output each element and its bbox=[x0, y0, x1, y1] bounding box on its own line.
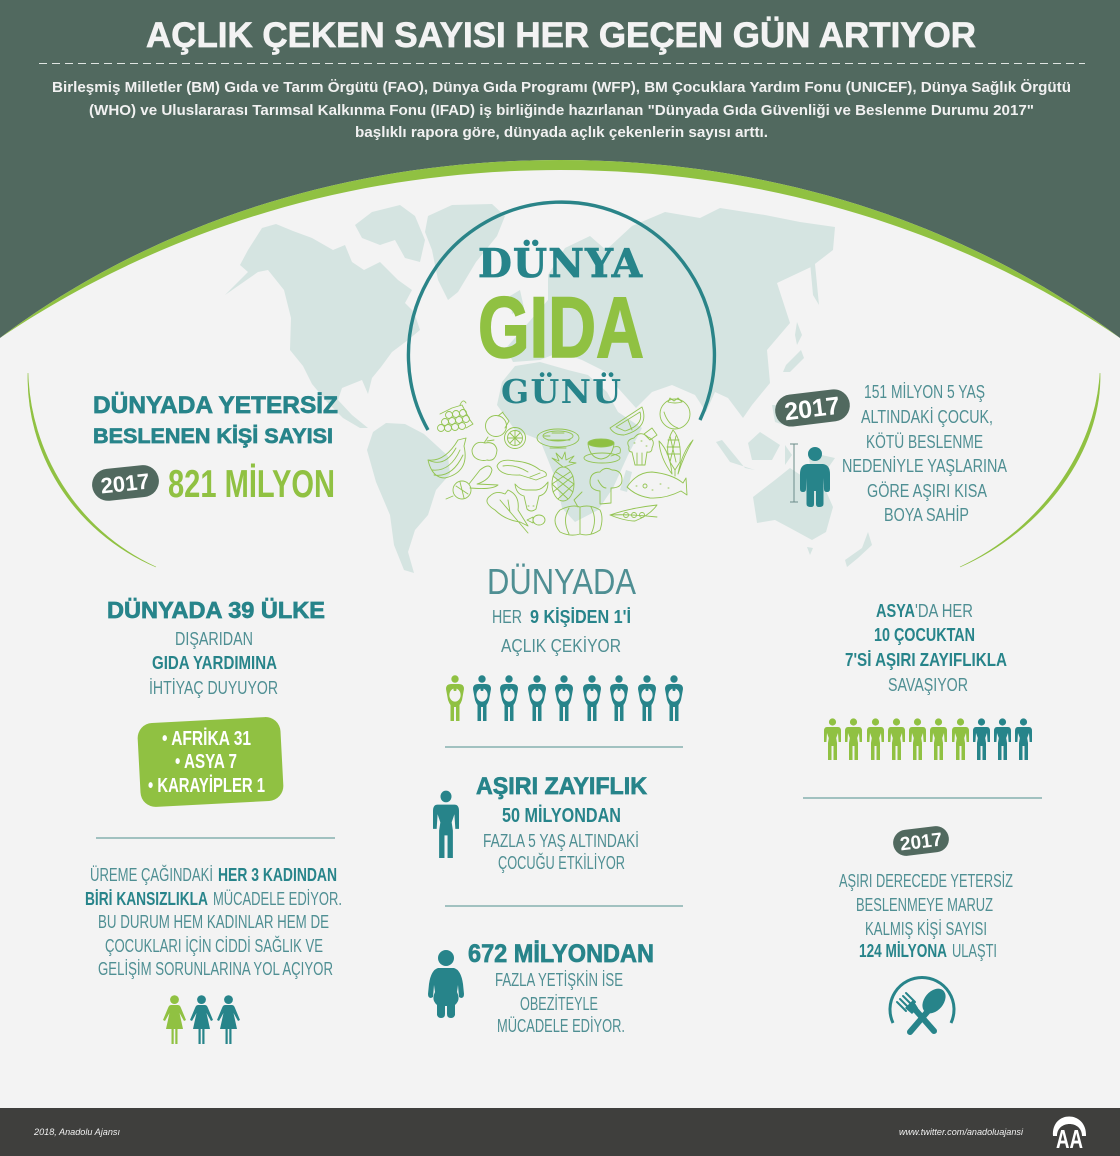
title: AÇLIK ÇEKEN SAYISI HER GEÇEN GÜN ARTIYOR bbox=[146, 16, 976, 55]
green box bbox=[137, 716, 284, 808]
year pill bbox=[773, 387, 852, 428]
year pill bbox=[892, 825, 950, 857]
year pill bbox=[91, 464, 160, 502]
icon: acorn bbox=[527, 515, 545, 525]
icon: apple bbox=[486, 412, 509, 436]
text block bbox=[842, 382, 1007, 525]
text block: 151 MİLYON 5 YAŞ bbox=[864, 382, 985, 402]
heading: gunu: GÜNÜ bbox=[501, 371, 621, 411]
intro text bbox=[52, 79, 1071, 141]
number: 672 MİLYONDAN bbox=[468, 940, 654, 968]
text block: DIŞARIDAN bbox=[175, 629, 253, 649]
text block: FAZLA 5 YAŞ ALTINDAKİ bbox=[483, 831, 639, 851]
left side arc bbox=[28, 373, 156, 567]
badge: dunya gida gunu bbox=[408, 202, 714, 430]
icon: second apple bbox=[472, 437, 497, 460]
text block: 9 KİŞİDEN 1'İ bbox=[530, 607, 631, 627]
text block: ÇOCUĞU ETKİLİYOR bbox=[498, 852, 625, 873]
text block: AÇLIK ÇEKİYOR bbox=[501, 636, 621, 656]
text block bbox=[149, 629, 278, 698]
icon: agency logo: AA bbox=[1056, 1124, 1083, 1154]
text block: İHTİYAÇ DUYUYOR bbox=[149, 678, 278, 698]
icon: bananas bbox=[428, 438, 466, 478]
height scale bbox=[790, 444, 798, 502]
panel: asia children bbox=[824, 601, 1032, 760]
icon: three women bbox=[163, 995, 240, 1044]
icon: agency logo bbox=[1053, 1116, 1086, 1154]
icon: spinach bbox=[487, 490, 528, 533]
icon: muffin bbox=[628, 428, 657, 465]
text block bbox=[845, 601, 1007, 695]
text block bbox=[85, 864, 342, 979]
text block: GÖRE AŞIRI KISA bbox=[867, 481, 987, 501]
text block: SAVAŞIYOR bbox=[888, 675, 968, 695]
right side arc bbox=[960, 373, 1100, 567]
green box: • AFRİKA 31 bbox=[162, 727, 251, 750]
icon: lime bbox=[504, 428, 526, 448]
text block: BU DURUM HEM KADINLAR HEM DE bbox=[98, 912, 329, 932]
icon: broccoli bbox=[590, 468, 622, 504]
text block bbox=[483, 831, 639, 873]
icon: short child bbox=[800, 447, 830, 507]
icon: lemon wedge bbox=[610, 407, 644, 435]
icon: fork and spoon bbox=[890, 977, 954, 1032]
text block: ALTINDAKİ ÇOCUK, bbox=[861, 407, 993, 427]
heading: DÜNYADA 39 ÜLKE bbox=[107, 597, 325, 623]
icon: fish bbox=[627, 472, 687, 498]
icon: pineapple bbox=[552, 452, 576, 501]
heading: gida: GIDA bbox=[478, 280, 644, 376]
number: 821 MİLYON bbox=[168, 463, 335, 506]
text block: ÜREME ÇAĞINDAKİ bbox=[90, 864, 213, 885]
icon: thin person bbox=[433, 791, 459, 858]
text block: BESLENMEYE MARUZ bbox=[856, 895, 993, 915]
green arc bbox=[0, 160, 1120, 338]
text block: BOYA SAHİP bbox=[884, 505, 969, 525]
text block: GELİŞİM SORUNLARINA YOL AÇIYOR bbox=[98, 959, 333, 979]
heading: DÜNYADA bbox=[487, 561, 636, 602]
icon: pumpkin bbox=[555, 492, 602, 535]
footer bar bbox=[0, 1108, 1120, 1156]
text block: HER 3 KADINDAN bbox=[218, 865, 337, 885]
heading: AŞIRI ZAYIFLIK bbox=[476, 773, 648, 800]
icon: obese person bbox=[428, 950, 464, 1018]
panel: undernourished count bbox=[91, 392, 338, 506]
text block bbox=[839, 871, 1013, 961]
text block: FAZLA YETİŞKİN İSE bbox=[495, 970, 623, 990]
text block: KÖTÜ BESLENME bbox=[866, 432, 983, 452]
icon: corn bbox=[659, 430, 693, 476]
ring bbox=[408, 202, 714, 430]
intro text: Birleşmiş Milletler (BM) Gıda ve Tarım Örgütü (FAO), Dünya Gıda Programı (WFP), BM Çocuklara Yardım Fonu (UNICEF), Dünya Sağlık Örgütü bbox=[52, 79, 1071, 96]
panel: one in nine bbox=[446, 561, 683, 721]
icon: plate bbox=[537, 429, 579, 448]
text block: KALMIŞ KİŞİ SAYISI bbox=[865, 919, 987, 939]
icon: beet bbox=[446, 466, 498, 499]
footer credit: 2018, Anadolu Ajansı bbox=[33, 1127, 120, 1137]
header band bbox=[0, 0, 1120, 338]
panel: obesity bbox=[428, 940, 654, 1036]
icon: cup bbox=[584, 439, 620, 463]
text block bbox=[495, 970, 625, 1036]
panel: wasting bbox=[433, 773, 648, 873]
text block bbox=[492, 607, 631, 656]
green box: • ASYA 7 bbox=[175, 751, 237, 773]
year pill: 2017 bbox=[99, 469, 151, 498]
text block: 7'Sİ AŞIRI ZAYIFLIKLA bbox=[845, 650, 1007, 670]
footer url: www.twitter.com/anadoluajansi bbox=[899, 1127, 1024, 1137]
icon row: nine people bbox=[446, 675, 683, 721]
heading: dunya: DÜNYA bbox=[478, 240, 643, 287]
intro text: (WHO) ve Uluslararası Tarımsal Kalkınma Fonu (IFAD) iş birliğinde hazırlanan "Dünyada Gıda Güvenliği ve Beslenme Durumu 2017" bbox=[89, 102, 1034, 119]
icon row: ten children bbox=[824, 718, 1032, 760]
green box: • KARAYİPLER 1 bbox=[148, 774, 265, 797]
icon: peas bbox=[610, 505, 657, 521]
icon: meat bbox=[497, 460, 546, 480]
year pill: 2017 bbox=[899, 829, 943, 855]
panel: women anaemia bbox=[85, 864, 342, 1044]
text block: AŞIRI DERECEDE YETERSİZ bbox=[839, 871, 1013, 891]
subheading: BESLENEN KİŞİ SAYISI bbox=[93, 425, 333, 448]
heading: DÜNYADA YETERSİZ bbox=[93, 392, 338, 419]
year pill: 2017 bbox=[783, 392, 841, 426]
food illustrations bbox=[428, 398, 693, 535]
number: 50 MİLYONDAN bbox=[502, 804, 621, 827]
text block: GIDA YARDIMINA bbox=[152, 653, 277, 673]
text block: MÜCADELE EDİYOR. bbox=[497, 1016, 625, 1036]
text block: HER bbox=[492, 607, 522, 627]
world map bbox=[225, 204, 872, 573]
panel: extreme undernourishment bbox=[839, 825, 1013, 1032]
panel: 39 countries bbox=[107, 597, 325, 808]
icon: tomato bbox=[660, 398, 690, 429]
text block: OBEZİTEYLE bbox=[520, 994, 598, 1014]
icon: bull head bbox=[515, 482, 548, 511]
panel: stunted children bbox=[773, 382, 1007, 525]
intro text: başlıklı rapora göre, dünyada açlık çekenlerin sayısı arttı. bbox=[355, 124, 768, 141]
text block: MÜCADELE EDİYOR. bbox=[213, 889, 342, 909]
text block: ÇOCUKLARI İÇİN CİDDİ SAĞLIK VE bbox=[105, 935, 323, 956]
text block: ASYA bbox=[876, 601, 915, 621]
text block: 'DA HER bbox=[915, 601, 973, 621]
icon: grapes bbox=[438, 401, 473, 432]
text block: ULAŞTI bbox=[952, 941, 997, 961]
text block: BİRİ KANSIZLIKLA bbox=[85, 889, 208, 909]
text block: 124 MİLYONA bbox=[859, 941, 947, 961]
text block: 10 ÇOCUKTAN bbox=[874, 625, 975, 645]
text block: NEDENİYLE YAŞLARINA bbox=[842, 456, 1007, 476]
